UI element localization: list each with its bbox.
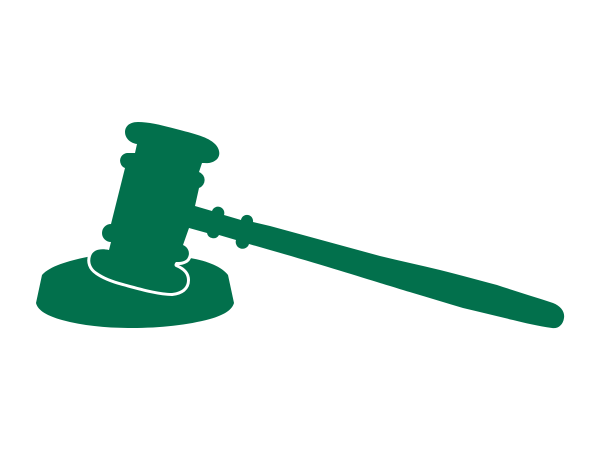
sound block base [36,252,234,328]
gavel head and handle [90,122,564,328]
